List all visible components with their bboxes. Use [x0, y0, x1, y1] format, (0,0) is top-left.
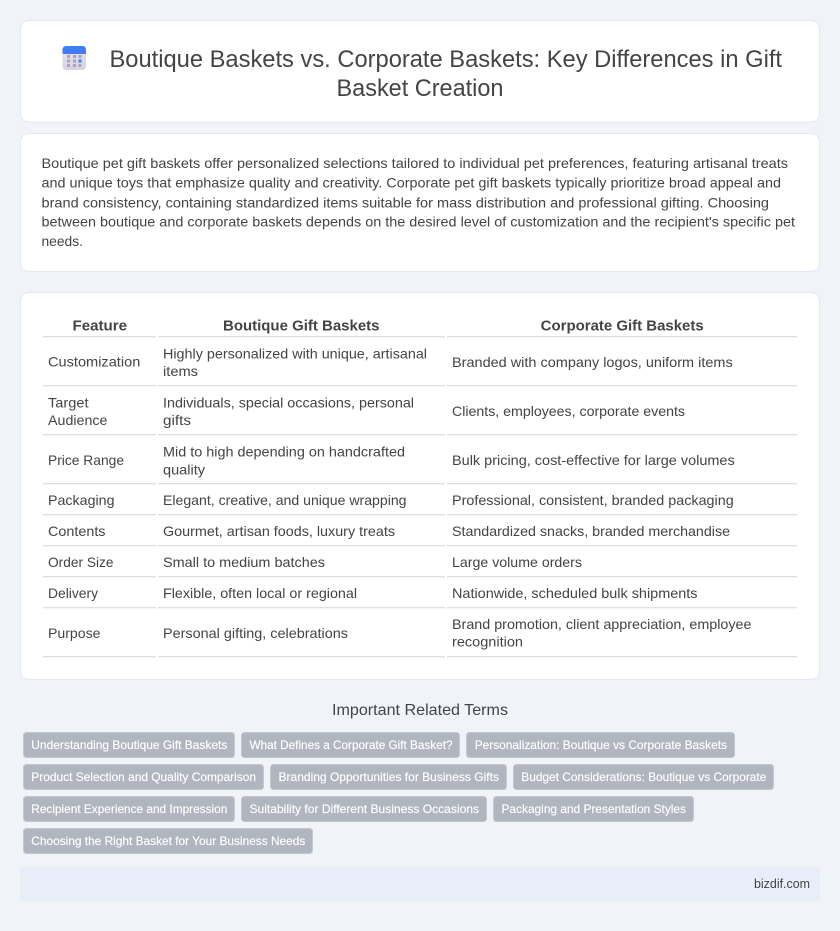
- table header: Feature: [72, 319, 127, 335]
- row: price range: Mid to high depending on handcrafted: [163, 444, 405, 460]
- row: customization: Highly personalized with unique, artisanal: [163, 345, 427, 361]
- row: target audience: [48, 394, 685, 428]
- row: price range: Price Range: [48, 452, 124, 468]
- row: packaging: Packaging: [48, 492, 114, 508]
- table header: [72, 319, 704, 335]
- title: [110, 46, 782, 102]
- title: Boutique Baskets vs. Corporate Baskets: Key Differences in Gift: [110, 46, 782, 73]
- row: target audience: Audience: [48, 412, 108, 428]
- row: packaging: [48, 492, 734, 508]
- row: target audience: Target: [48, 394, 89, 410]
- row: delivery: Nationwide, scheduled bulk shipments: [452, 585, 698, 601]
- intro text block: brand consistency, containing standardized items suitable for mass distribution and professional gifting. Choosing: [42, 194, 769, 210]
- row: customization: [48, 345, 733, 379]
- row: delivery: Delivery: [48, 585, 98, 601]
- row: target audience: Clients, employees, corporate events: [452, 403, 685, 419]
- row: target audience: gifts: [163, 412, 191, 428]
- row: contents: Contents: [48, 523, 106, 539]
- intro text block: between boutique and corporate baskets depends on the desired level of customization and the recipient's specific pet: [42, 214, 795, 230]
- row: order size: Order Size: [48, 554, 114, 570]
- related terms tags: Understanding Boutique Gift Baskets: [31, 738, 227, 752]
- related terms tags: Packaging and Presentation Styles: [502, 802, 686, 816]
- row: purpose: Purpose: [48, 625, 101, 641]
- row: delivery: [48, 585, 698, 601]
- row: contents: [48, 523, 730, 539]
- row: purpose: Personal gifting, celebrations: [163, 625, 348, 641]
- row: delivery: Flexible, often local or regional: [163, 585, 357, 601]
- intro text block: needs.: [42, 233, 83, 249]
- row: purpose: [48, 616, 752, 650]
- panel: title card: [20, 20, 820, 122]
- related terms tags: [24, 732, 774, 854]
- footer: bizdif.com: [754, 877, 810, 891]
- related terms tags: Suitability for Different Business Occasions: [250, 802, 479, 816]
- related terms tags: Choosing the Right Basket for Your Business Needs: [31, 834, 305, 848]
- row: customization: Customization: [48, 354, 140, 370]
- icon: calendar: [62, 46, 86, 70]
- table header: Corporate Gift Baskets: [541, 319, 704, 335]
- title: Basket Creation: [336, 75, 504, 102]
- row: contents: Standardized snacks, branded merchandise: [452, 523, 730, 539]
- table header: Boutique Gift Baskets: [223, 319, 380, 335]
- related terms tags: What Defines a Corporate Gift Basket?: [250, 738, 453, 752]
- intro text block: [42, 155, 795, 249]
- row: price range: quality: [163, 461, 205, 477]
- row: purpose: Brand promotion, client appreciation, employee: [452, 616, 752, 632]
- related terms tags: Recipient Experience and Impression: [31, 802, 227, 816]
- row: price range: [48, 444, 735, 477]
- related terms tags: Product Selection and Quality Comparison: [31, 770, 256, 784]
- row: target audience: Individuals, special occasions, personal: [163, 394, 414, 410]
- footer: [20, 867, 820, 901]
- row: purpose: recognition: [452, 634, 523, 650]
- intro text block: and unique toys that emphasize quality and creativity. Corporate pet gift baskets typically prioritize broad appeal and: [42, 174, 781, 190]
- row: price range: Bulk pricing, cost-effective for large volumes: [452, 452, 735, 468]
- related terms tags: Branding Opportunities for Business Gifts: [278, 770, 499, 784]
- row: order size: Large volume orders: [452, 554, 582, 570]
- panel: introduction: [20, 134, 820, 272]
- row: packaging: Professional, consistent, branded packaging: [452, 492, 734, 508]
- row: order size: Small to medium batches: [163, 554, 325, 570]
- related terms tags: Personalization: Boutique vs Corporate Baskets: [475, 738, 727, 752]
- row: order size: [48, 554, 582, 570]
- related terms tags: Budget Considerations: Boutique vs Corporate: [521, 770, 767, 784]
- row: customization: items: [163, 363, 198, 379]
- row: customization: Branded with company logos, uniform items: [452, 354, 733, 370]
- row: packaging: Elegant, creative, and unique wrapping: [163, 492, 406, 508]
- panel: comparison table: [20, 292, 820, 680]
- intro text block: Boutique pet gift baskets offer personalized selections tailored to individual pet preferences, featuring artisanal treats: [42, 155, 788, 171]
- heading: important related terms: Important Related Terms: [332, 702, 508, 719]
- row: contents: Gourmet, artisan foods, luxury treats: [163, 523, 395, 539]
